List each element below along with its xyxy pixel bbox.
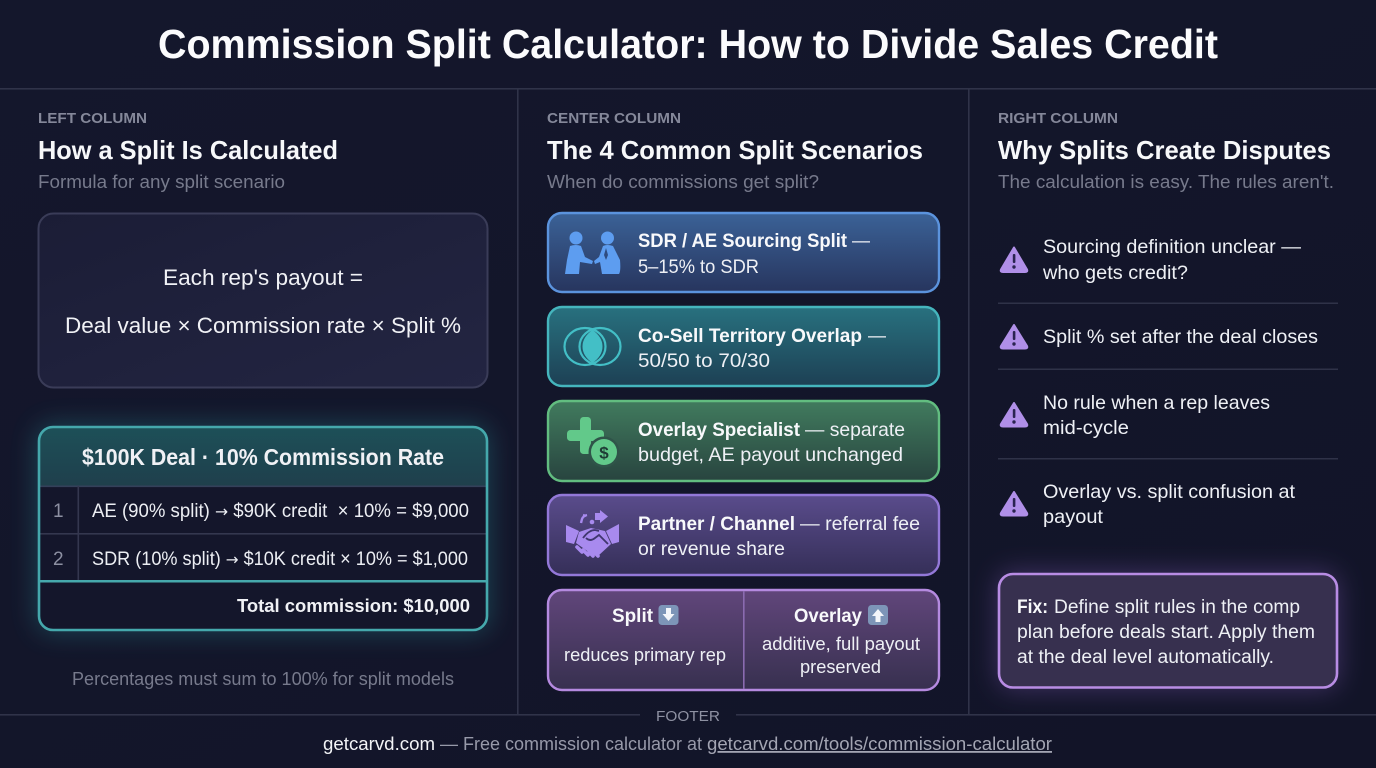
center column heading: The 4 Common Split Scenarios [547, 135, 923, 165]
worked example table: 2 [53, 549, 64, 570]
dispute 3 [1001, 392, 1270, 439]
worked example table: $100K Deal · 10% Commission Rate [82, 444, 444, 470]
split side: Split [612, 605, 653, 627]
left column subheading: Formula for any split scenario [38, 172, 285, 192]
footer: — Free commission calculator at [440, 734, 702, 754]
card: co-sell territory overlap [548, 307, 939, 386]
fix callout [997, 571, 1339, 690]
title: Commission Split Calculator: How to Divide Sales Credit [158, 21, 1218, 67]
dispute 4: Overlay vs. split confusion at [1043, 481, 1296, 503]
dispute 3: No rule when a rep leaves [1043, 392, 1270, 414]
dispute 1 [1001, 236, 1302, 284]
dispute 3: mid-cycle [1043, 417, 1129, 439]
icon: down arrow badge [658, 605, 678, 625]
footer: FOOTER [656, 708, 720, 725]
worked example table: Total commission: $10,000 [237, 595, 470, 616]
card: overlay specialist: budget, AE payout unchanged [638, 444, 903, 466]
formula box: Each rep's payout = [163, 265, 363, 290]
card: overlay specialist [548, 401, 939, 481]
split side [564, 605, 726, 665]
card: overlay specialist: — separate [805, 419, 905, 441]
card: co-sell territory overlap: Co-Sell Territory Overlap [638, 325, 862, 347]
worked example table [36, 424, 490, 633]
icon: warning triangle [1001, 492, 1027, 516]
fix callout: Define split rules in the comp [1054, 597, 1300, 618]
dispute 4 [1001, 481, 1296, 528]
dispute 2: Split % set after the deal closes [1043, 326, 1318, 348]
card: SDR / AE sourcing split: — [852, 230, 870, 252]
fix callout: at the deal level automatically. [1017, 647, 1274, 668]
footer [0, 708, 1376, 754]
overlay side: preserved [800, 656, 881, 677]
icon: handshake [566, 510, 619, 556]
overlay side: Overlay [794, 605, 862, 627]
icon: warning triangle [1001, 325, 1027, 348]
dispute 1: Sourcing definition unclear — [1043, 236, 1302, 258]
card: partner / channel: Partner / Channel [638, 513, 795, 535]
card: co-sell territory overlap: — [868, 325, 886, 347]
card: co-sell territory overlap: 50/50 to 70/30 [638, 350, 770, 372]
dispute 4: payout [1043, 506, 1104, 528]
left column heading: How a Split Is Calculated [38, 135, 338, 165]
card: partner / channel: or revenue share [638, 538, 785, 560]
right column eyebrow: RIGHT COLUMN [998, 111, 1118, 127]
icon: warning triangle [1001, 403, 1027, 426]
panel: center column [547, 111, 939, 690]
split side: reduces primary rep [564, 644, 726, 665]
card: overlay specialist: Overlay Specialist [638, 419, 800, 441]
card: SDR / AE sourcing split [548, 213, 939, 292]
icon: warning triangle [1001, 248, 1027, 272]
overlay side: additive, full payout [762, 633, 920, 654]
fix callout: Fix: [1017, 597, 1048, 618]
dispute 1: who gets credit? [1042, 262, 1188, 284]
panel: right column [997, 111, 1339, 690]
right column heading: Why Splits Create Disputes [998, 135, 1331, 165]
center column eyebrow: CENTER COLUMN [547, 111, 681, 127]
icon: plus with dollar badge [567, 417, 620, 468]
panel: left column [36, 111, 490, 689]
center column subheading: When do commissions get split? [547, 172, 819, 192]
footer: getcarvd.com/tools/commission-calculator [707, 734, 1052, 754]
card: partner / channel [548, 495, 939, 575]
formula box: Deal value × Commission rate × Split % [65, 313, 461, 338]
formula box [38, 214, 488, 388]
card: SDR / AE sourcing split: 5–15% to SDR [638, 256, 759, 278]
left column note: Percentages must sum to 100% for split models [72, 669, 454, 689]
icon: two people shaking hands [565, 232, 620, 274]
worked example table: 1 [53, 501, 64, 522]
footer: getcarvd.com [323, 734, 435, 754]
right column subheading: The calculation is easy. The rules aren't. [998, 172, 1334, 192]
icon: plus with dollar badge: $ [599, 444, 609, 462]
icon: overlapping circles [564, 328, 620, 365]
card: SDR / AE sourcing split: SDR / AE Sourcing Split [638, 230, 847, 252]
left column eyebrow: LEFT COLUMN [38, 111, 147, 127]
fix callout: plan before deals start. Apply them [1017, 622, 1315, 643]
worked example table: AE (90% split) → $90K credit × 10% = $9,000 [92, 501, 469, 522]
overlay side [762, 605, 920, 677]
icon: up arrow badge [868, 605, 888, 625]
comparison: split vs overlay [548, 590, 939, 690]
card: partner / channel: — referral fee [800, 513, 920, 535]
worked example table: SDR (10% split) → $10K credit × 10% = $1,000 [92, 549, 468, 570]
